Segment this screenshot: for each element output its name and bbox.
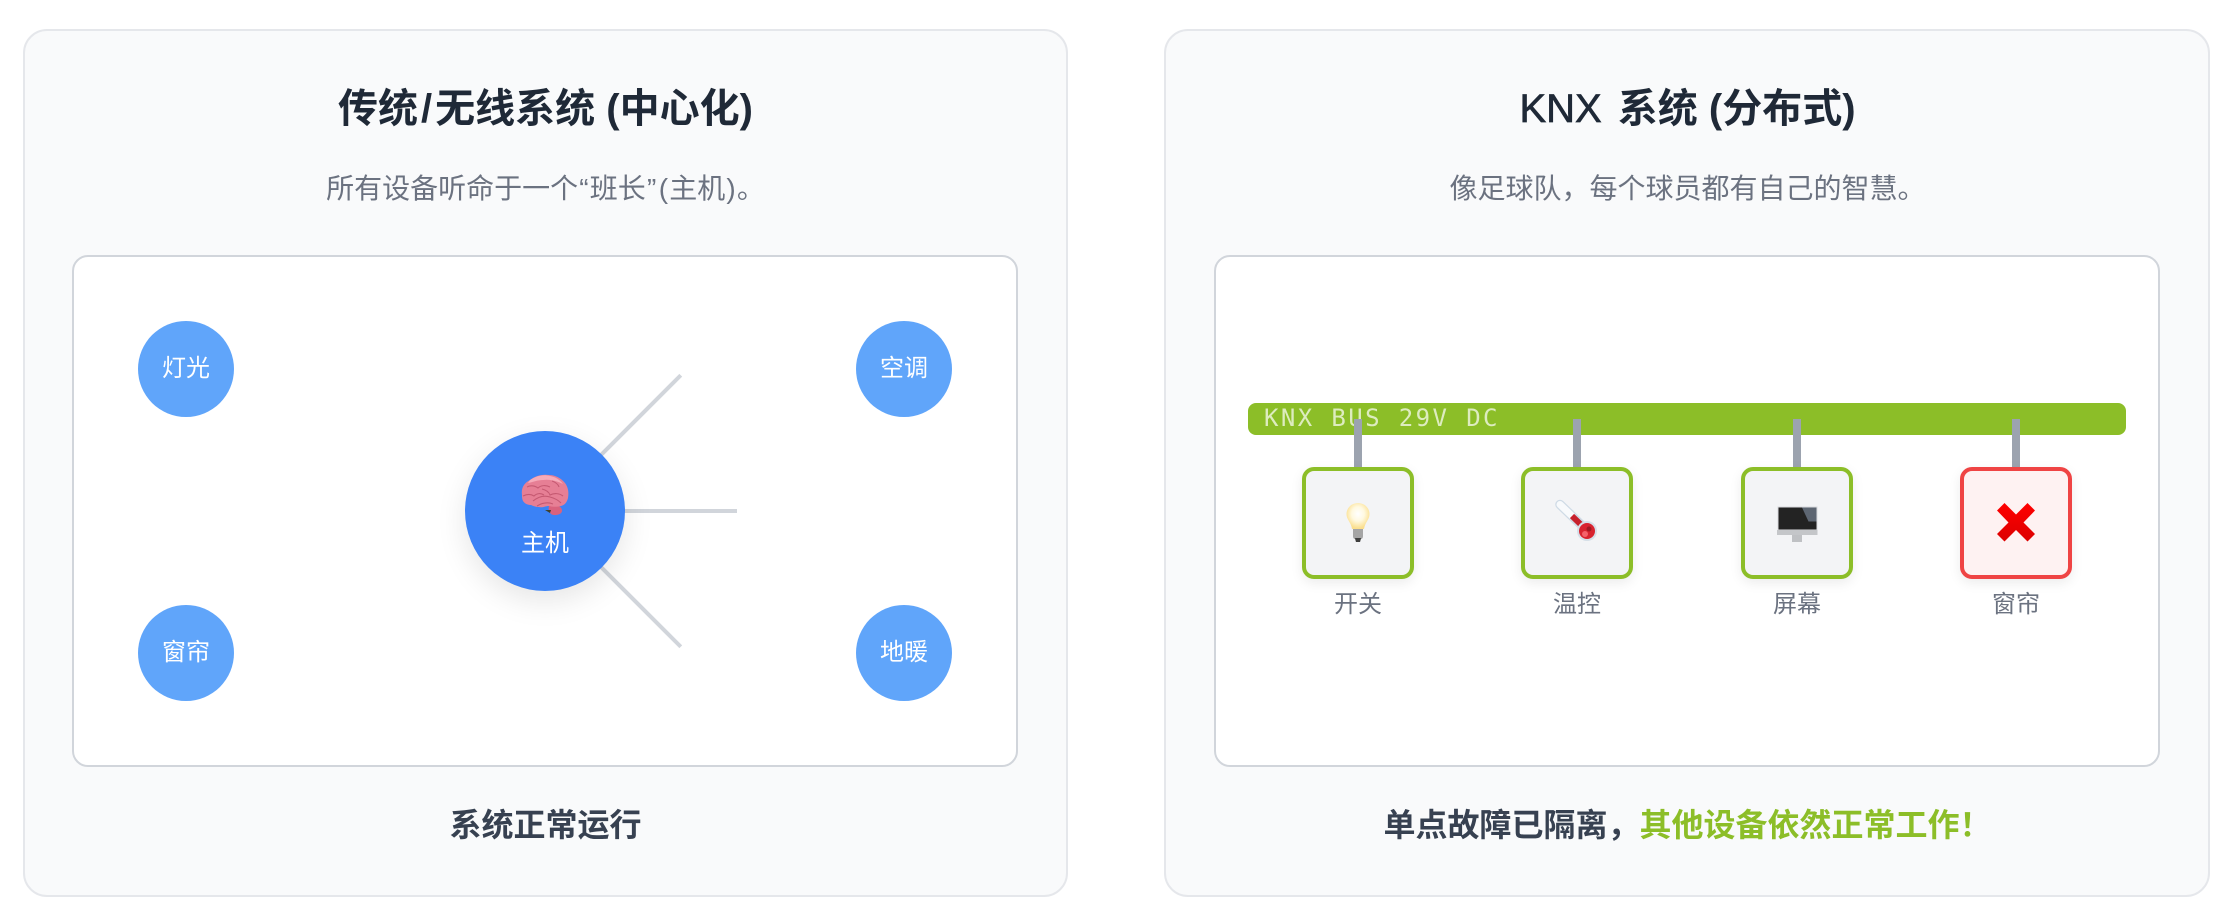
bus stem: curtains bbox=[2012, 419, 2020, 467]
bus stem: switch bbox=[1354, 419, 1362, 467]
diagram box: centralized bbox=[72, 255, 1018, 767]
device node: curtains: 窗帘 bbox=[162, 639, 210, 666]
icon: red cross bbox=[1997, 503, 2035, 542]
device: screen bbox=[1741, 467, 1853, 579]
icon: brain bbox=[522, 474, 568, 516]
label: switch: 开关 bbox=[1334, 591, 1382, 618]
label: screen: 屏幕 bbox=[1773, 591, 1821, 618]
device node: floor heating bbox=[856, 605, 952, 701]
device node: floor heating: 地暖 bbox=[880, 639, 928, 666]
device node: lights bbox=[138, 321, 234, 417]
panel: KNX system bbox=[1164, 29, 2210, 897]
connection line: upper bbox=[544, 374, 682, 512]
status text: traditional system: 系统正常运行 bbox=[449, 807, 642, 843]
central host node bbox=[465, 431, 625, 591]
diagram box: distributed bbox=[1214, 255, 2160, 767]
icon: thermometer bbox=[1555, 500, 1597, 541]
label: curtains: 窗帘 bbox=[1992, 591, 2040, 618]
device node: air conditioning bbox=[856, 321, 952, 417]
device: thermostat bbox=[1521, 467, 1633, 579]
heading: traditional system: 传统/无线系统 (中心化) bbox=[338, 87, 753, 131]
KNX bus bar: KNX BUS 29V DC bbox=[1264, 404, 1500, 432]
heading: KNX system: KNX 系统 (分布式) bbox=[1519, 87, 1856, 131]
subtitle: KNX system: 像足球队，每个球员都有自己的智慧。 bbox=[1449, 173, 1926, 204]
subtitle: traditional system: 所有设备听命于一个“班长”(主机)。 bbox=[326, 173, 765, 204]
bus stem: thermostat bbox=[1573, 419, 1581, 467]
label: thermostat: 温控 bbox=[1553, 591, 1601, 618]
connection line: lower bbox=[544, 510, 682, 648]
KNX bus bar bbox=[1248, 403, 2126, 435]
icon: desktop monitor bbox=[1777, 506, 1818, 542]
device node: lights: 灯光 bbox=[162, 355, 210, 382]
device: failed curtains bbox=[1960, 467, 2072, 579]
device: switch bbox=[1302, 467, 1414, 579]
connection line: middle bbox=[545, 509, 737, 513]
panel: traditional wireless system bbox=[23, 29, 1068, 897]
device node: air conditioning: 空调 bbox=[880, 355, 928, 382]
status text: KNX system: 单点故障已隔离，其他设备依然正常工作！ bbox=[1383, 807, 1992, 843]
device node: curtains bbox=[138, 605, 234, 701]
bus stem: screen bbox=[1793, 419, 1801, 467]
central host node: 主机 bbox=[521, 530, 569, 557]
icon: light bulb bbox=[1346, 503, 1370, 542]
